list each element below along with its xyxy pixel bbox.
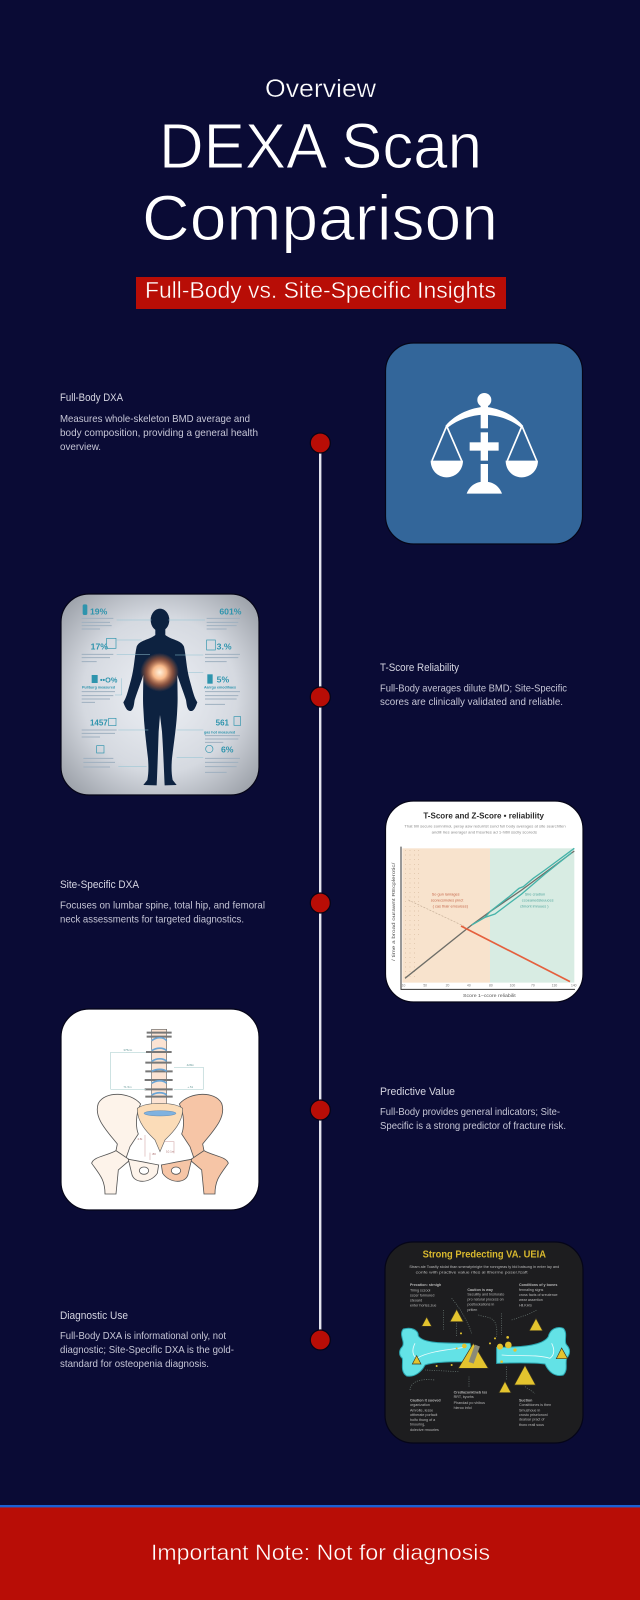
callouts top: Hll.KHS — [519, 1303, 532, 1307]
tick labels: 10 — [402, 984, 406, 988]
callouts bottom: Credlazonktneb lss — [454, 1391, 487, 1395]
subtitle banner: Full-Body vs. Site-Specific Insights — [145, 277, 496, 303]
stat labels: 3.% — [217, 641, 232, 651]
text block: Full-Body DXA: Full-Body DXA — [60, 392, 124, 404]
stat labels: Pullburg measured — [82, 685, 115, 689]
callouts bottom: Caution it suoved — [410, 1398, 441, 1402]
image card: pelvis and spine — [61, 1009, 259, 1210]
axes — [401, 847, 575, 989]
dimension lines: +.51 — [187, 1085, 194, 1089]
left bone — [400, 1328, 475, 1376]
callouts bottom: dealoar pract of — [519, 1418, 545, 1422]
callouts top: sccer formored — [410, 1293, 434, 1297]
right bone — [497, 1328, 570, 1376]
callouts bottom: Suction — [519, 1398, 532, 1402]
callouts top: steoard — [410, 1298, 422, 1302]
callouts top: wear assertion — [519, 1298, 543, 1302]
footer note: Important Note: Not for diagnosis — [151, 1540, 490, 1565]
dimension lines: 71.5m — [123, 1085, 132, 1089]
data lines — [405, 848, 574, 982]
callouts bottom: tmouring, — [410, 1423, 425, 1427]
callouts bottom: Amrolte, lesse — [410, 1408, 433, 1412]
tick labels: 20 — [446, 984, 450, 988]
text block: Diagnostic Use: standard for osteopenia diagnosis. — [60, 1358, 209, 1370]
header — [136, 75, 506, 309]
text block: T-Score Reliability: Full-Body averages dilute BMD; Site-Specific — [380, 682, 567, 694]
text block: Site-Specific DXA — [60, 879, 265, 926]
y-axis label: / time a broad ourawnt REcplerotic/ — [391, 862, 396, 961]
dimension lines: 428m — [187, 1063, 195, 1067]
body silhouette — [123, 609, 197, 785]
image card: fractured bone warning — [385, 1242, 583, 1443]
text blocks and leader lines — [82, 618, 240, 772]
text block: Full-Body DXA: overview. — [60, 441, 101, 453]
spine — [145, 1029, 173, 1108]
tick labels: 79 — [531, 984, 535, 988]
dimension lines: 10.1m — [166, 1150, 175, 1154]
callouts top: Tiring sczool — [410, 1288, 431, 1292]
callouts bottom: ottherate porfacit — [410, 1413, 437, 1417]
callouts bottom: holfo thung of a — [410, 1418, 436, 1422]
zone annotations: ctmont imruues ) — [520, 904, 549, 908]
callouts top: postlockations in — [467, 1303, 494, 1307]
tick labels: 100 — [510, 984, 515, 988]
text block: Diagnostic Use: Full-Body DXA is informational only, not — [60, 1330, 226, 1342]
chart subtitle — [404, 825, 566, 835]
sacrum — [137, 1103, 183, 1152]
callouts top: Precation: strnigh — [410, 1283, 441, 1287]
x-axis label: Score 1–ccore reliabilit — [463, 993, 516, 999]
callouts top: pro natural process on — [467, 1298, 504, 1302]
callouts bottom: Phandad po vhibus — [454, 1401, 485, 1405]
tick labels — [402, 984, 577, 988]
text block: Predictive Value: Full-Body provides general indicators; Site- — [380, 1106, 560, 1118]
text block: Site-Specific DXA: neck assessments for targeted diagnostics. — [60, 914, 244, 926]
chart subtitle: andill Ires average/ and fnsurlies ad 1-hitill ssclly scoreds — [432, 831, 537, 835]
card subtitle: Stram ale Toasfly stolat than smeratyrinigte the ronngreas ty bld batsung in enter lay and — [409, 1265, 559, 1269]
callouts top: pritien — [467, 1308, 477, 1312]
card subtitle: confe wilh practive value rites al ltherme poser.fcaft — [416, 1271, 528, 1275]
callouts bottom: dolectve rmouries — [410, 1428, 439, 1432]
card title: Strong Predecting VA. UEIA — [423, 1249, 546, 1260]
icon card: medical scales — [386, 343, 582, 544]
warning triangles — [412, 1309, 568, 1393]
text block: Predictive Value — [380, 1086, 566, 1132]
plot zones — [402, 848, 574, 983]
stat labels: gas hot measured — [204, 730, 235, 734]
callouts top — [410, 1283, 558, 1312]
image card: body composition — [61, 594, 259, 795]
stat labels: 17% — [91, 641, 108, 651]
zone annotations: scorecsmoles pinct — [431, 898, 464, 902]
dotted leader lines — [410, 1298, 537, 1393]
text block: Full-Body DXA: Measures whole-skeleton BMD average and — [60, 413, 250, 425]
zone annotations: ( cas thair emsuices) — [433, 904, 469, 908]
callouts bottom: hleroo infol — [454, 1406, 472, 1410]
stat labels: Aarrgu emodihaes — [204, 685, 236, 689]
callouts bottom — [410, 1391, 551, 1432]
text block: Full-Body DXA — [60, 392, 258, 453]
text block: T-Score Reliability — [380, 662, 567, 708]
dimension lines: 4.6t — [137, 1137, 142, 1141]
text block: Predictive Value: Predictive Value — [380, 1086, 455, 1098]
callouts bottom: thoro reall sous — [519, 1423, 544, 1427]
text block: Diagnostic Use — [60, 1310, 234, 1370]
stat labels: 6% — [221, 745, 234, 755]
timeline — [310, 433, 330, 1350]
eyebrow: Overview: Overview — [265, 75, 377, 103]
fracture debris — [436, 1332, 517, 1367]
right femur — [190, 1151, 228, 1194]
stat labels: 5% — [217, 674, 229, 684]
callouts top: Condltlons of y bones — [519, 1283, 557, 1287]
zone annotations: Sire cradion — [525, 892, 545, 896]
stat labels: 19% — [90, 606, 108, 616]
chart title: T-Score and Z-Score • reliability — [423, 811, 545, 820]
dimension lines: .80 — [152, 1152, 156, 1156]
zone annotations — [431, 892, 554, 908]
stat labels — [82, 606, 242, 755]
callouts bottom: Consifdones is then — [519, 1403, 551, 1407]
callouts bottom: Smushoue in — [519, 1408, 540, 1412]
left femur — [92, 1151, 130, 1194]
stat labels: ••O% — [100, 675, 118, 684]
right ilium — [179, 1094, 223, 1158]
tick labels: 80 — [489, 984, 493, 988]
chart subtitle: That trill secure somnimol, peray asw redurrist sund full body averages at site searchlten — [404, 825, 566, 829]
text block: Predictive Value: Specific is a strong predictor of fracture risk. — [380, 1120, 566, 1132]
tick labels: 40 — [467, 984, 471, 988]
text block: Site-Specific DXA: Site-Specific DXA — [60, 879, 140, 891]
zone annotations: So gun lanrages — [432, 892, 460, 896]
title line 2: Comparison — [142, 182, 498, 254]
image card: T-Score chart — [386, 801, 583, 1002]
callouts bottom: crosto priselononl — [519, 1413, 548, 1417]
zone annotations: ccoeanedsleuuces — [522, 898, 554, 902]
text block: Diagnostic Use: Diagnostic Use — [60, 1310, 128, 1322]
callouts bottom: organization — [410, 1403, 430, 1407]
title line 1: DEXA Scan — [159, 110, 482, 182]
dimension lines — [111, 1048, 203, 1160]
callouts top: Secullity and tnsrlorato — [467, 1292, 504, 1296]
callouts top: Caution is way — [467, 1288, 494, 1292]
text block: Full-Body DXA: body composition, providing a general health — [60, 427, 258, 439]
footer banner — [0, 1505, 640, 1600]
stat labels: 1457 — [90, 719, 108, 728]
text block: T-Score Reliability: T-Score Reliability — [380, 662, 459, 674]
callouts top: enter hortes.zue — [410, 1303, 436, 1307]
text block: T-Score Reliability: scores are clinically validated and reliable. — [380, 696, 563, 708]
bone highlights — [413, 1343, 554, 1358]
small pictograms — [83, 604, 241, 753]
stat labels: 601% — [219, 606, 242, 616]
tick labels: 130 — [552, 984, 557, 988]
tick labels: 50 — [423, 984, 427, 988]
callouts top: fennaling signs — [519, 1288, 544, 1292]
tick labels: 140 — [571, 984, 577, 988]
dimension lines: 375cm — [123, 1048, 133, 1052]
callouts top: cross facts of sreutence — [519, 1293, 558, 1297]
left ilium — [97, 1094, 141, 1158]
stat labels: 561 — [216, 719, 230, 728]
card subtitle — [409, 1265, 559, 1275]
text block: Diagnostic Use: diagnostic; Site-Specific DXA is the gold- — [60, 1344, 234, 1356]
callouts bottom: RRT, byorhs — [454, 1395, 474, 1399]
pubic bones — [128, 1159, 192, 1181]
text block: Site-Specific DXA: Focuses on lumbar spine, total hip, and femoral — [60, 900, 265, 912]
